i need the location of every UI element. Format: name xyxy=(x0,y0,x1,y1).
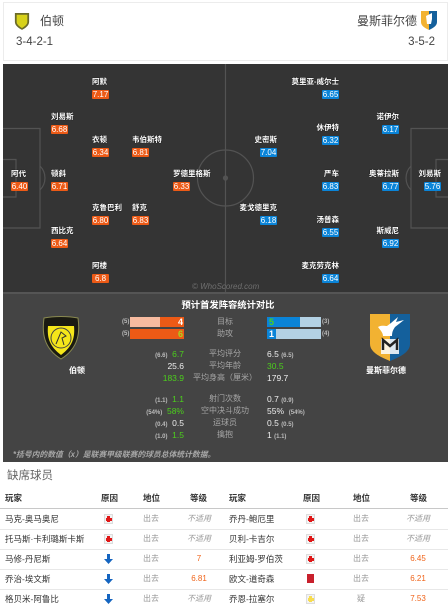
panel: stats comparison xyxy=(3,292,448,462)
player: 克鲁巴利 xyxy=(92,203,122,225)
row 5 xyxy=(0,592,448,605)
player: 奥蒂拉斯: 6.77 xyxy=(383,182,398,191)
row 1 xyxy=(5,514,431,524)
row 1: 马克-奥马奥尼 xyxy=(5,514,59,524)
row: tackles: (1.0) 1.5 xyxy=(155,430,184,440)
row: tackles xyxy=(155,430,286,440)
row 4: 乔治-埃文斯 xyxy=(5,574,50,584)
player: 莫里亚-威尔士: 6.65 xyxy=(323,90,338,99)
row 1: 不适用 xyxy=(187,514,211,523)
player: 韦伯斯特: 韦伯斯特 xyxy=(132,135,162,144)
player: 斯威尼 xyxy=(376,226,399,248)
player: 西比克 xyxy=(51,226,74,248)
row: aerial duels: 55% (54%) xyxy=(267,406,305,416)
player: 阿代: 阿代 xyxy=(11,169,26,178)
row: average age xyxy=(167,361,284,371)
player: 莫里亚-威尔士: 莫里亚-威尔士 xyxy=(292,77,339,86)
table header: 玩家 xyxy=(5,493,22,503)
table header: 玩家 xyxy=(229,493,246,503)
row 5: 出去 xyxy=(143,594,159,603)
icon: Mansfield crest large xyxy=(370,314,410,361)
row: shots: 0.7 (0.9) xyxy=(267,394,294,404)
player: 克鲁巴利: 6.80 xyxy=(93,216,108,225)
row 4: 出去 xyxy=(143,574,159,583)
player: 斯威尼: 斯威尼 xyxy=(376,226,399,235)
row: average rating: (6.6) 6.7 xyxy=(155,349,184,359)
player: 麦克劳克林: 6.64 xyxy=(323,274,338,283)
table header: 原因 xyxy=(101,493,118,503)
table header: 地位 xyxy=(353,493,370,503)
player: 麦戈德里克: 麦戈德里克 xyxy=(240,203,277,212)
row 5: 7.53 xyxy=(410,594,426,603)
player: 汤普森: 6.55 xyxy=(323,228,338,237)
player: 阿默 xyxy=(92,77,109,99)
assists bar: home: (5) xyxy=(122,331,129,337)
player: 史密斯 xyxy=(254,135,277,157)
label: goals: 目标 xyxy=(217,317,233,326)
row: aerial duels xyxy=(146,406,305,416)
row: average height: 179.7 xyxy=(267,373,288,383)
row: shots: 射门次数 xyxy=(209,394,241,403)
row 3: 6.45 xyxy=(410,554,426,563)
player: 衣顿 xyxy=(92,135,109,157)
row 3: 出去 xyxy=(143,554,159,563)
row: average rating: 平均评分 xyxy=(209,349,241,358)
row 1: 乔丹-鲍厄里 xyxy=(229,514,274,524)
row: average height: 183.9 xyxy=(163,373,184,383)
goals bar: away xyxy=(267,317,330,327)
row 3: 马修-丹尼斯 xyxy=(5,554,50,564)
row 5: 不适用 xyxy=(187,594,211,603)
player: 休伊特 xyxy=(316,123,339,145)
heading: missing players: 缺席球员 xyxy=(7,470,53,482)
player: 莫里亚-威尔士 xyxy=(292,77,339,99)
row 5: 疑 xyxy=(357,594,365,603)
row 2: 贝利-卡吉尔 xyxy=(229,534,274,544)
row: dribbles: 0.5 (0.5) xyxy=(267,418,294,428)
row 3: 7 xyxy=(197,554,201,563)
player: 汤普森 xyxy=(316,215,339,237)
goals bar: home: 4 xyxy=(178,317,183,327)
away team name: 曼斯菲尔德 xyxy=(357,14,417,28)
row 2: 不适用 xyxy=(187,534,211,543)
row: aerial duels: (54%) 58% xyxy=(146,406,184,416)
player: 衣顿: 衣顿 xyxy=(92,135,107,144)
row: shots xyxy=(155,394,294,404)
table header: 地位 xyxy=(143,493,160,503)
row 4: 6.21 xyxy=(410,574,426,583)
away formation: 3-5-2 xyxy=(408,36,435,48)
label: assists: 助攻 xyxy=(217,329,233,338)
row: dribbles xyxy=(155,418,294,428)
player: 诺伊尔: 6.17 xyxy=(383,125,398,134)
row: average age: 25.6 xyxy=(167,361,184,371)
row 4: 欧文-道奇森 xyxy=(229,574,274,584)
panel: pitch xyxy=(3,64,448,292)
row: dribbles: (0.4) 0.5 xyxy=(155,418,184,428)
player: 韦伯斯特 xyxy=(132,135,162,157)
player: 休伊特: 休伊特 xyxy=(316,123,339,132)
icon: Mansfield crest small xyxy=(421,11,437,30)
row: average height xyxy=(163,373,288,383)
player: 阿代: 6.40 xyxy=(12,182,27,191)
player: 阿默: 7.17 xyxy=(93,90,108,99)
player: 休伊特: 6.32 xyxy=(323,136,338,145)
row 3: 利亚姆-罗伯茨 xyxy=(229,554,283,564)
row: average height: 平均身高（厘米） xyxy=(193,373,257,382)
player: 阿默: 阿默 xyxy=(92,77,107,86)
player: 顿科 xyxy=(51,169,68,191)
row: average age: 平均年龄 xyxy=(209,361,241,370)
row 5: 乔恩-拉塞尔 xyxy=(229,594,274,604)
player: 西比克: 西比克 xyxy=(51,226,74,235)
row: average rating xyxy=(155,349,294,359)
away team label: 曼斯菲尔德 xyxy=(366,366,406,375)
icon: Burton crest small xyxy=(14,13,30,30)
assists bar: away xyxy=(267,329,330,339)
home formation: 3-4-2-1 xyxy=(16,36,53,48)
player: 罗德里格斯: 罗德里格斯 xyxy=(173,169,210,178)
player: 奥蒂拉斯: 奥蒂拉斯 xyxy=(369,169,399,178)
player: 严车: 严车 xyxy=(324,169,339,178)
row: dribbles: 运球员 xyxy=(213,418,237,427)
player: 麦克劳克林: 麦克劳克林 xyxy=(302,261,339,270)
row 2 xyxy=(0,532,448,548)
player: 汤普森: 汤普森 xyxy=(316,215,339,224)
row 1: 不适用 xyxy=(406,514,430,523)
assists bar: away: (4) xyxy=(322,331,329,337)
player: 麦戈德里克: 6.18 xyxy=(261,216,276,225)
player: 刘易斯: 6.68 xyxy=(52,125,67,134)
row: average rating: 6.5 (6.5) xyxy=(267,349,294,359)
player: 舒克: 6.83 xyxy=(133,216,148,225)
pitch markings xyxy=(3,64,448,292)
row: average age: 30.5 xyxy=(267,361,284,371)
table header: 原因 xyxy=(303,493,320,503)
player: 克鲁巴利: 克鲁巴利 xyxy=(92,203,122,212)
footnote: *括号内的数值（x）是联赛甲级联赛的球员总体统计数据。 xyxy=(13,450,215,459)
row 1: 出去 xyxy=(353,514,369,523)
watermark: © WhoScored.com xyxy=(192,282,259,291)
row 4: 6.81 xyxy=(191,574,207,583)
row 2: 出去 xyxy=(353,534,369,543)
goals bar: away: (3) xyxy=(322,319,329,325)
player: 顿科: 6.71 xyxy=(52,182,67,191)
row 5: 格贝米-阿鲁比 xyxy=(5,594,59,604)
row: shots: (1.1) 1.1 xyxy=(155,394,184,404)
player: 西比克: 6.64 xyxy=(52,239,67,248)
goals bar: home xyxy=(122,317,184,327)
home team label: 伯顿 xyxy=(69,366,85,375)
assists bar: home: 6 xyxy=(178,329,183,339)
row 2: 出去 xyxy=(143,534,159,543)
player: 刘易斯: 刘易斯 xyxy=(418,169,441,178)
player: 韦伯斯特: 6.81 xyxy=(133,148,148,157)
player: 阿楼 xyxy=(92,261,109,283)
goals bar: home: (5) xyxy=(122,319,129,325)
row 2: 不适用 xyxy=(406,534,430,543)
player: 阿代 xyxy=(11,169,28,191)
player: 顿科: 顿斜 xyxy=(51,169,66,178)
player: 阿楼: 阿楼 xyxy=(92,261,107,270)
player: 严车 xyxy=(322,169,339,191)
player: 诺伊尔: 诺伊尔 xyxy=(376,112,399,121)
player: 舒克 xyxy=(132,203,149,225)
player: 麦戈德里克 xyxy=(240,203,277,225)
player: 舒克: 舒克 xyxy=(132,203,147,212)
player: 刘易斯: 刘易斯 xyxy=(51,112,74,121)
row 2: 托马斯·卡利璐斯卡斯 xyxy=(5,534,84,544)
player: 罗德里格斯: 6.33 xyxy=(174,182,189,191)
player: 衣顿: 6.34 xyxy=(93,148,108,157)
table header: 等级 xyxy=(190,493,207,503)
assists bar: home xyxy=(122,329,184,339)
row 4 xyxy=(0,572,448,588)
row: aerial duels: 空中决斗成功 xyxy=(201,406,249,415)
row 3 xyxy=(0,552,448,568)
assists bar: away: 1 xyxy=(269,329,274,339)
player: 刘易斯 xyxy=(418,169,441,191)
table header xyxy=(5,493,427,503)
goals bar: away: 5 xyxy=(269,317,274,327)
header card xyxy=(3,2,448,61)
player: 诺伊尔 xyxy=(376,112,399,134)
row 3: 出去 xyxy=(353,554,369,563)
player: 刘易斯: 5.76 xyxy=(425,182,440,191)
player: 刘易斯 xyxy=(51,112,74,134)
player: 麦克劳克林 xyxy=(302,261,339,283)
row 1: 出去 xyxy=(143,514,159,523)
row 4: 出去 xyxy=(353,574,369,583)
row: tackles: 擒抱 xyxy=(217,430,233,439)
player: 罗德里格斯 xyxy=(173,169,210,191)
table header: 等级 xyxy=(410,493,427,503)
home team name: 伯顿 xyxy=(40,14,64,28)
header divider xyxy=(0,508,448,509)
icon: Burton crest large xyxy=(42,316,80,360)
player: 斯威尼: 6.92 xyxy=(383,239,398,248)
stats heading: 预计首发阵容统计对比 xyxy=(182,300,274,310)
player: 史密斯: 7.04 xyxy=(261,148,276,157)
player: 严车: 6.83 xyxy=(323,182,338,191)
player: 史密斯: 史密斯 xyxy=(254,135,277,144)
player: 奥蒂拉斯 xyxy=(369,169,399,191)
player: 阿楼: 6.8 xyxy=(95,274,106,283)
row: tackles: 1 (1.1) xyxy=(267,430,286,440)
